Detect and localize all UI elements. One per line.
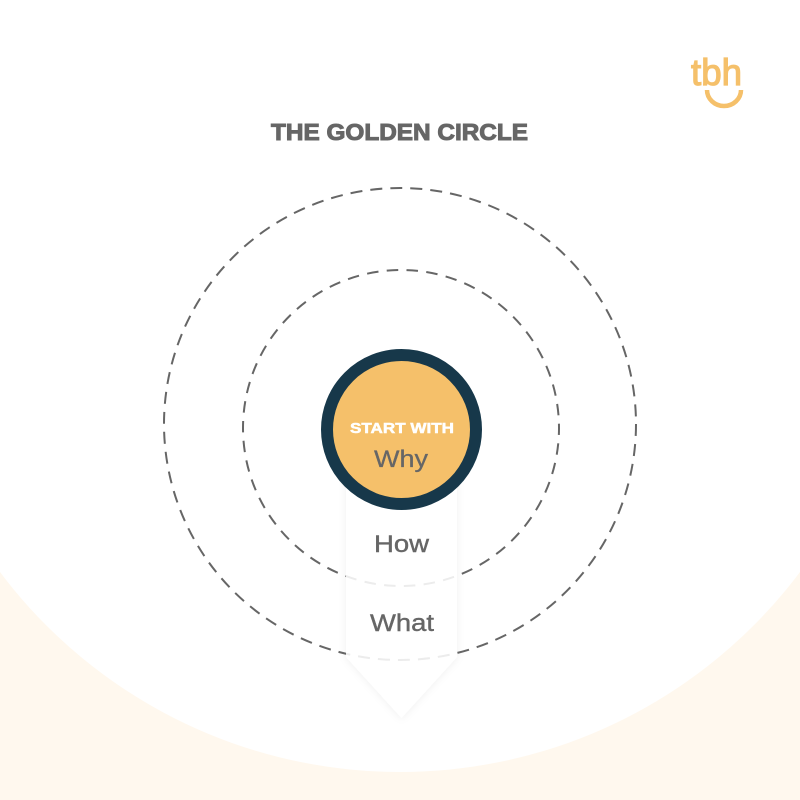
center circle: why xyxy=(327,355,476,504)
title: THE GOLDEN CIRCLE xyxy=(271,119,528,145)
label: how: How xyxy=(374,531,430,558)
label: what: What xyxy=(370,610,434,637)
center circle disc xyxy=(327,355,476,504)
logo: tbh xyxy=(691,52,742,106)
inner dashed circle: how xyxy=(243,270,559,586)
logo smile xyxy=(707,90,741,106)
arrow panel shape xyxy=(346,470,457,718)
faded dashes inside panel xyxy=(346,575,454,661)
center text: why: Why xyxy=(374,446,428,473)
logo wordmark: tbh xyxy=(691,52,742,93)
outer dashed circle: what xyxy=(164,188,636,660)
center text: start with: START WITH xyxy=(350,421,454,437)
arrow panel: how and what xyxy=(346,575,454,661)
